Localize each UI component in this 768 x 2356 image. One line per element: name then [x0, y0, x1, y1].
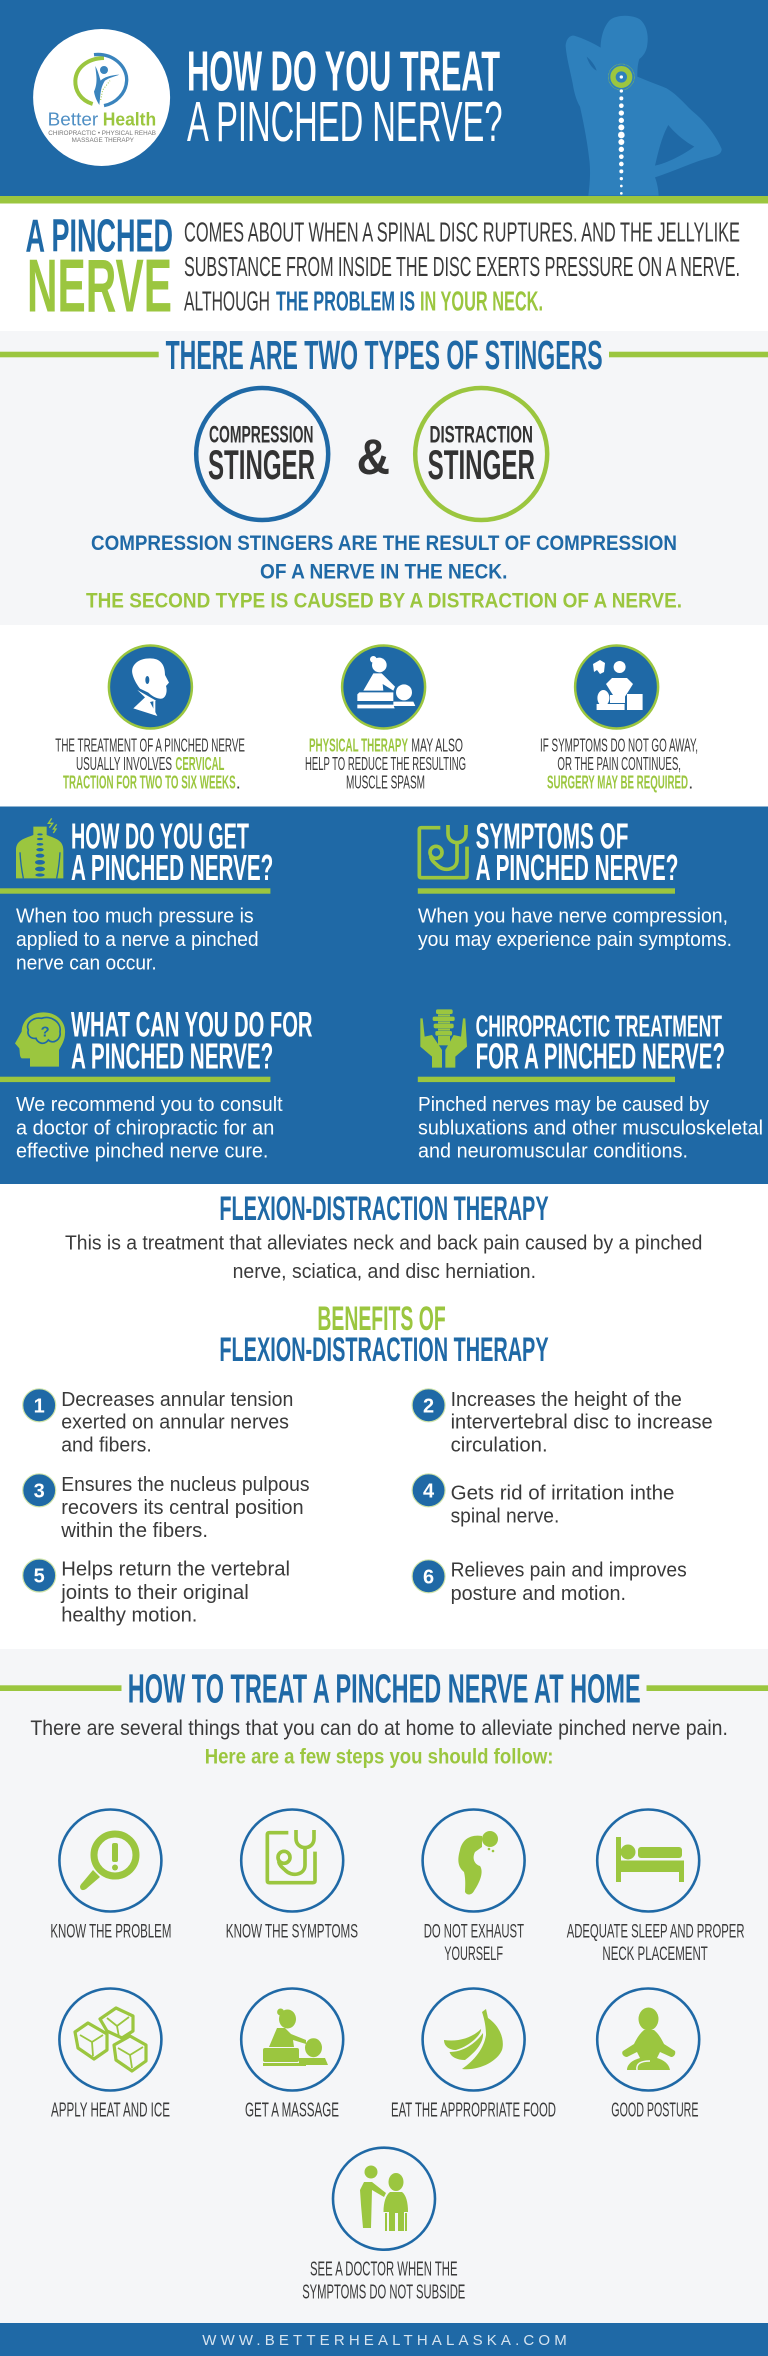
- text block: We recommend you to consult: [16, 1093, 283, 1116]
- heading: A PINCHED NERVE?: [71, 847, 273, 888]
- circle: distraction stinger: STINGER: [428, 441, 535, 488]
- text block: [16, 905, 259, 974]
- step: do not exhaust yourself: DO NOT EXHAUST: [424, 1920, 524, 1942]
- text block: stinger descriptions: COMPRESSION STINGERS ARE THE RESULT OF COMPRESSION: [91, 532, 677, 555]
- heading: SYMPTOMS OF: [476, 815, 628, 856]
- circle: compression stinger: STINGER: [208, 441, 315, 488]
- step: apply heat and ice: APPLY HEAT AND ICE: [51, 2100, 170, 2122]
- text block: When too much pressure is: [16, 905, 254, 928]
- benefit 1: Decreases annular tension: [61, 1388, 293, 1411]
- step: eat the appropriate food: EAT THE APPROPRIATE FOOD: [391, 2100, 556, 2122]
- heading: a pinched nerve: [26, 210, 173, 328]
- text block: applied to a nerve a pinched: [16, 928, 259, 951]
- benefit 4: 4: [423, 1480, 435, 1502]
- text: physical therapy: PHYSICAL THERAPY: [309, 736, 408, 756]
- circle: distraction stinger: [415, 388, 547, 520]
- circle: distraction stinger: DISTRACTION: [430, 422, 533, 449]
- logo: Better Health: MASSAGE THERAPY: [72, 138, 134, 144]
- footer: [0, 2323, 768, 2356]
- text: cervical traction: THE TREATMENT OF A PINCHED NERVE: [55, 736, 245, 756]
- benefit 1: [23, 1388, 293, 1457]
- benefit 6: 6: [423, 1566, 434, 1588]
- panel: questions: [0, 806, 768, 1184]
- text: cervical traction: CERVICAL: [175, 754, 224, 774]
- heading: benefits: [219, 1300, 549, 1369]
- step: see a doctor: SYMPTOMS DO NOT SUBSIDE: [302, 2281, 465, 2303]
- benefit 2: 2: [423, 1396, 434, 1418]
- benefit 1: and fibers.: [61, 1434, 152, 1457]
- benefit 3: recovers its central position: [61, 1496, 304, 1519]
- benefit 2: circulation.: [451, 1434, 548, 1457]
- step: do not exhaust yourself: [423, 1810, 525, 1965]
- benefit 6: posture and motion.: [451, 1582, 626, 1605]
- title: A PINCHED NERVE?: [187, 90, 502, 154]
- text: physical therapy: MAY ALSO: [411, 736, 463, 756]
- logo: Better Health: [33, 29, 170, 166]
- text: cervical traction: [55, 736, 245, 793]
- step: know the problem: [50, 1810, 171, 1942]
- step: do not exhaust yourself: YOURSELF: [444, 1943, 503, 1965]
- footer: WWW.BETTERHEALTHALASKA.COM: [202, 2332, 567, 2349]
- panel: header: [0, 0, 768, 204]
- text block: definition: IN YOUR NECK.: [420, 286, 543, 317]
- text block: definition: THE PROBLEM IS: [276, 286, 415, 317]
- heading: flexion-distraction therapy: FLEXION-DISTRACTION THERAPY: [219, 1190, 549, 1228]
- icon: head with brain: ?: [41, 1025, 50, 1041]
- benefit 3: [23, 1473, 310, 1542]
- heading: [71, 1005, 312, 1076]
- text block: and neuromuscular conditions.: [418, 1139, 688, 1162]
- heading: benefits: BENEFITS OF: [317, 1300, 446, 1338]
- benefit 5: [23, 1558, 290, 1627]
- heading: a pinched nerve: A PINCHED: [26, 210, 173, 262]
- text block: intro: [30, 1717, 728, 1769]
- heading: benefits: FLEXION-DISTRACTION THERAPY: [219, 1331, 549, 1369]
- logo: Better Health: CHIROPRACTIC • PHYSICAL REHAB: [48, 131, 156, 137]
- panel: two types of stingers: [0, 331, 768, 625]
- heading: A PINCHED NERVE?: [71, 1035, 273, 1076]
- panel: flexion-distraction therapy: [23, 1190, 713, 1627]
- step: get a massage: [241, 1988, 343, 2122]
- circle: compression stinger: COMPRESSION: [209, 422, 314, 449]
- title: HOW DO YOU TREAT: [187, 40, 500, 103]
- text block: Pinched nerves may be caused by: [418, 1093, 710, 1116]
- benefit 1: exerted on annular nerves: [61, 1411, 289, 1434]
- heading: HOW DO YOU GET: [71, 815, 249, 856]
- benefit 2: Increases the height of the: [451, 1388, 682, 1411]
- logo: Better Health: Health: [103, 110, 156, 130]
- text: physical therapy: MUSCLE SPASM: [346, 773, 425, 793]
- text block: definition: ALTHOUGH: [184, 286, 270, 317]
- block: chiropractic treatment: [418, 1009, 763, 1162]
- icon: surgery: [575, 646, 658, 728]
- ampersand: &: [357, 429, 390, 485]
- text block: stinger descriptions: THE SECOND TYPE IS CAUSED BY A DISTRACTION OF A NERVE.: [86, 590, 682, 613]
- benefit 4: [412, 1474, 674, 1527]
- text: physical therapy: [305, 736, 466, 793]
- step: know the problem: KNOW THE PROBLEM: [50, 1920, 171, 1942]
- panel: treatments: [55, 646, 698, 793]
- text: cervical traction: .: [236, 773, 241, 793]
- text block: you may experience pain symptoms.: [418, 928, 732, 951]
- logo: Better Health: Better: [48, 110, 98, 130]
- text block: nerve can occur.: [16, 951, 157, 974]
- step: get a massage: GET A MASSAGE: [245, 2100, 339, 2122]
- icon: spine held in hands: [420, 1009, 467, 1068]
- text block: stinger descriptions: OF A NERVE IN THE NECK.: [260, 561, 507, 584]
- benefit 5: healthy motion.: [61, 1604, 197, 1627]
- benefit 5: joints to their original: [60, 1581, 249, 1604]
- panel: treat at home: [0, 1649, 768, 2323]
- text block: therapy description: nerve, sciatica, and disc herniation.: [233, 1260, 536, 1283]
- heading: a pinched nerve: NERVE: [27, 244, 172, 328]
- heading: [476, 815, 678, 888]
- benefit 3: Ensures the nucleus pulpous: [61, 1473, 310, 1496]
- step: know the symptoms: [226, 1810, 358, 1942]
- benefit 6: Relieves pain and improves: [451, 1559, 687, 1582]
- benefit 2: [412, 1388, 713, 1457]
- icon: head with brain: [15, 1012, 65, 1067]
- benefit 3: within the fibers.: [60, 1519, 208, 1542]
- block: symptoms: [418, 815, 732, 951]
- text block: subluxations and other musculoskeletal: [418, 1116, 763, 1139]
- text block: [16, 1093, 283, 1162]
- icon: cervical traction head: [109, 646, 192, 728]
- text block: [418, 1093, 763, 1162]
- icon: back with spine: [16, 818, 63, 878]
- heading: [71, 815, 273, 888]
- text: physical therapy: HELP TO REDUCE THE RESULTING: [305, 754, 466, 774]
- step: know the symptoms: KNOW THE SYMPTOMS: [226, 1920, 358, 1942]
- text: surgery: .: [688, 773, 693, 793]
- step: see a doctor: SEE A DOCTOR WHEN THE: [310, 2259, 458, 2281]
- benefit 5: Helps return the vertebral: [61, 1558, 290, 1581]
- text block: definition: [184, 217, 740, 317]
- benefit 3: 3: [34, 1480, 45, 1502]
- text block: [418, 905, 732, 951]
- illustration: body silhouette with pinched nerve: [566, 16, 722, 196]
- text block: When you have nerve compression,: [418, 905, 728, 928]
- text: surgery: [540, 736, 698, 793]
- text block: stinger descriptions: [86, 532, 682, 613]
- title: [187, 40, 502, 154]
- icon: stethoscope clipboard: [419, 825, 467, 878]
- benefit 2: intervertebral disc to increase: [451, 1411, 713, 1434]
- block: how do you get a pinched nerve: [16, 815, 273, 974]
- text block: intro: There are several things that you can do at home to alleviate pinched nerve pain.: [30, 1717, 728, 1740]
- block: what can you do: [15, 1005, 313, 1162]
- text block: effective pinched nerve cure.: [16, 1139, 268, 1162]
- benefit 6: [412, 1559, 687, 1605]
- benefit 1: 1: [34, 1396, 45, 1418]
- panel: definition: [26, 210, 740, 328]
- text block: therapy description: [65, 1231, 702, 1283]
- benefit 4: spinal nerve.: [451, 1504, 559, 1527]
- text: cervical traction: USUALLY INVOLVES: [76, 754, 172, 774]
- text: cervical traction: TRACTION FOR TWO TO SIX WEEKS: [63, 773, 236, 793]
- circle: compression stinger: [196, 388, 328, 520]
- step: adequate sleep: [567, 1810, 744, 1965]
- text block: a doctor of chiropractic for an: [16, 1116, 274, 1139]
- heading: [476, 1010, 725, 1076]
- text block: therapy description: This is a treatment that alleviates neck and back pain caused by a pinched: [65, 1231, 702, 1254]
- heading: WHAT CAN YOU DO FOR: [71, 1005, 312, 1045]
- benefit 4: Gets rid of irritation inthe: [451, 1481, 674, 1504]
- icon: physical therapy massage: [342, 646, 425, 728]
- step: see a doctor: [302, 2148, 465, 2303]
- step: good posture: [597, 1988, 699, 2122]
- benefit 5: 5: [34, 1566, 45, 1588]
- text block: intro: Here are a few steps you should follow:: [205, 1746, 553, 1769]
- step: eat the appropriate food: [391, 1988, 556, 2122]
- step: apply heat and ice: [51, 1988, 170, 2122]
